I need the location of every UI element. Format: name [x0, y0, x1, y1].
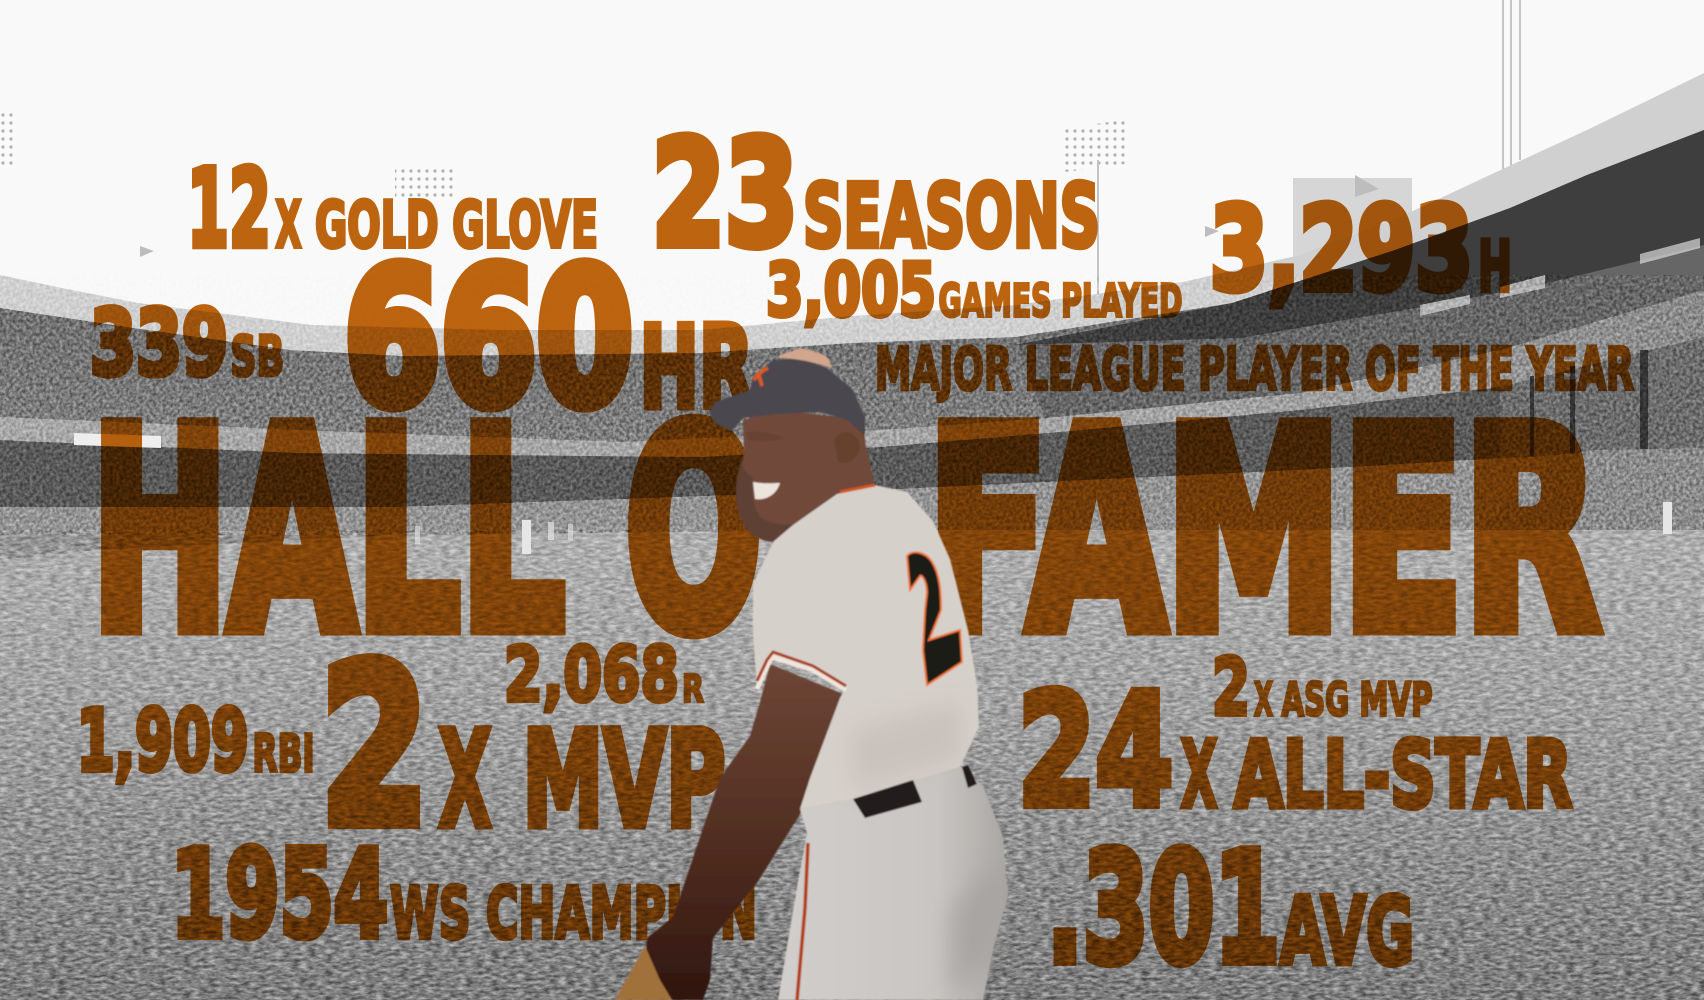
jersey shading [850, 700, 965, 790]
title: hall of famer [91, 372, 1600, 693]
number: 2,068 [504, 630, 679, 718]
pants shading [950, 868, 1000, 1000]
right upper seats [1015, 245, 1704, 422]
glove [615, 946, 672, 1000]
collar [840, 485, 875, 492]
pant stripe [797, 843, 808, 1000]
stat: 1,909 rbi [77, 692, 314, 791]
stat: 24x all-star [1018, 662, 1572, 841]
stand texture [0, 275, 1704, 535]
cap [709, 358, 865, 435]
outfield wall [1470, 448, 1704, 535]
player figure [615, 348, 1008, 1000]
label: GOLD GLOVE [315, 189, 598, 263]
label: ASG MVP [1282, 673, 1432, 727]
light towers and building [0, 0, 1520, 295]
number: 23 [652, 110, 798, 279]
lower dark stands [0, 337, 1704, 507]
jersey [753, 485, 979, 809]
brow shading [746, 431, 784, 441]
belt [853, 765, 977, 818]
hand on cap [778, 348, 831, 368]
number: 339 [90, 291, 228, 396]
distant players [415, 502, 1672, 554]
stat: 12x gold glove [187, 147, 598, 272]
label: RBI [252, 724, 314, 784]
number: 2 [1212, 644, 1250, 734]
number: 660 [344, 230, 633, 448]
label: AVG [1280, 878, 1414, 986]
stat: 3,005 games played [766, 248, 1182, 334]
ear [834, 432, 860, 463]
grandstand band [0, 290, 1704, 457]
right-field structure [1500, 337, 1704, 462]
raised arm behind head [736, 455, 800, 542]
number: 24 [1018, 662, 1173, 841]
label: R [682, 667, 704, 711]
stat: 1954 ws champion [171, 826, 757, 965]
outfield grass [0, 530, 1704, 1000]
multiplier: X [276, 189, 302, 263]
number: 3,293 [1210, 183, 1473, 317]
title: hall of famer: HALL [91, 372, 565, 693]
number: 2 [320, 621, 428, 874]
white banner [74, 433, 161, 448]
label: GAMES PLAYED [938, 275, 1182, 328]
number: 1954 [171, 826, 388, 965]
label: HR [640, 302, 754, 434]
label: SEASONS [803, 166, 1100, 268]
stat: 2,068 runs [504, 630, 704, 718]
label: H [1478, 226, 1512, 308]
stat: 660 home runs [344, 230, 754, 448]
label: WS CHAMPION [390, 872, 757, 955]
multiplier: X [439, 704, 491, 858]
lower seats [0, 455, 1560, 560]
head [742, 410, 875, 525]
stat: 2x asg mvp [1212, 644, 1432, 734]
stat: 3,293 hits [1210, 183, 1512, 317]
stat: 23 seasons [652, 110, 1100, 279]
upper facade [0, 73, 1704, 356]
multiplier: X [1254, 673, 1273, 727]
window gaps [1420, 238, 1700, 316]
smile [753, 482, 780, 499]
label: SB [230, 324, 284, 388]
cap logo [754, 368, 768, 386]
number: 1,909 [77, 692, 249, 791]
jersey number 2 [907, 552, 962, 685]
pants [778, 767, 1008, 1000]
upper deck roof shadow [1015, 130, 1704, 345]
number: 3,005 [766, 248, 936, 334]
label: MVP [522, 704, 726, 858]
number: .301 [1047, 820, 1280, 997]
stat: .301 avg [1047, 820, 1414, 997]
number: 12 [187, 147, 271, 272]
upper stands [0, 130, 1704, 448]
title: hall of famer: OF [625, 372, 873, 693]
sleeve trim [757, 657, 846, 690]
left arm [643, 664, 843, 1000]
stat: 2x mvp [320, 621, 726, 874]
multiplier: X [1181, 722, 1217, 828]
stat: 339 stolen bases [90, 291, 284, 396]
